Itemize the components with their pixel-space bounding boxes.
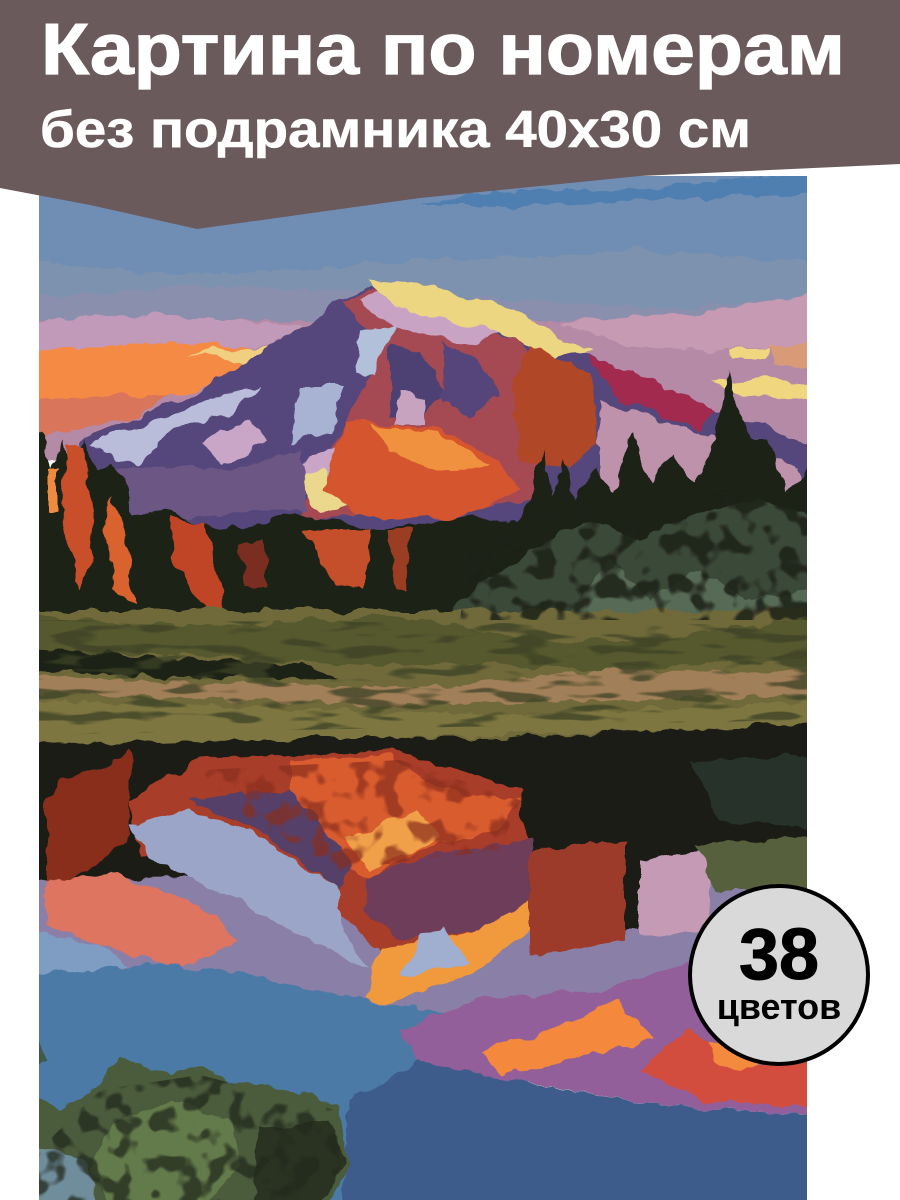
- badge label: цветов: [717, 986, 841, 1027]
- mountain: [80, 280, 830, 540]
- painting: mountain lake landscape: [20, 160, 830, 1200]
- meadow shore: [20, 610, 830, 755]
- badge number: 38: [739, 915, 819, 995]
- title: Картина по номерам: [41, 10, 845, 90]
- sunset clouds: [20, 292, 830, 460]
- subtitle: без подрамника 40х30 см: [40, 101, 751, 159]
- header banner: [0, 0, 900, 229]
- paint patches: [39, 490, 807, 1200]
- sky: [39, 176, 807, 323]
- lake reflection: [20, 722, 830, 1020]
- shoreline bush: [39, 1042, 350, 1200]
- badge: 38 colours: [690, 886, 868, 1064]
- forest: [39, 370, 807, 616]
- water with sunset reflection: [20, 875, 830, 1200]
